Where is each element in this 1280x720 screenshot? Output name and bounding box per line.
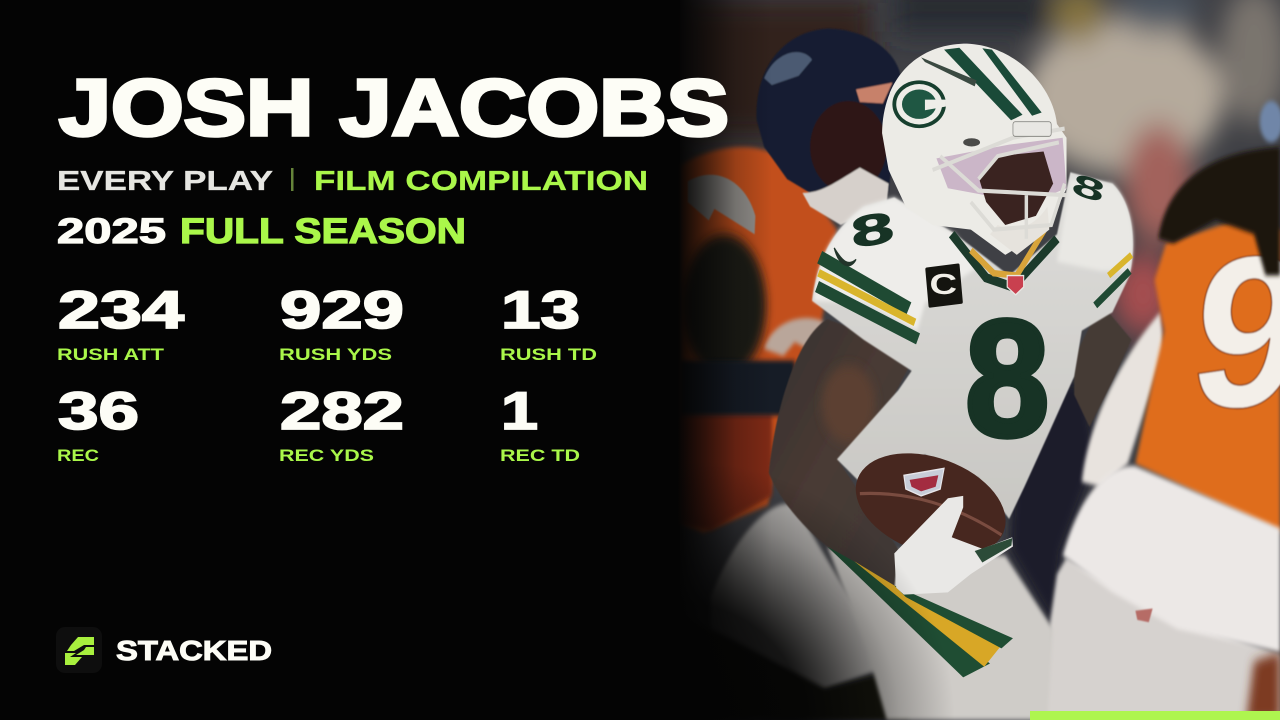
stat: rush yards: 929 [280,281,404,340]
stat: rush attempts: 234 [58,281,185,340]
icon: stacked logo [56,627,102,673]
stat: receiving touchdowns [500,382,580,465]
captain patch [925,263,963,308]
running back helmet [882,44,1067,255]
photo: running back in white jersey [527,0,1280,720]
season line [57,212,466,251]
sleeve stripes [820,257,909,309]
stat: rush attempts: RUSH ATT [57,345,165,364]
stat: rush touchdowns: RUSH TD [500,345,597,364]
season line: FULL SEASON [180,212,466,251]
swoosh [834,248,856,266]
stat: receptions: REC [57,446,99,465]
stat: rush yards [279,281,404,364]
chest number eight: 8 [965,286,1049,471]
shoulder highlights [814,197,979,331]
stat: receptions [57,382,139,465]
brand wordmark: STACKED [116,635,272,666]
G logo [892,80,946,128]
pants [827,546,1053,720]
shoulder number eight: 8 [849,203,896,258]
subtitle: every play, film compilation [57,165,648,196]
white shorts [1063,466,1280,652]
stat: receiving yards [279,382,404,465]
white sleeve arm [1082,312,1164,487]
title: JOSH JACOBS [59,63,729,152]
stat: receiving yards: REC YDS [279,446,374,465]
stat: receiving touchdowns: 1 [501,382,538,441]
leg [1036,558,1280,720]
stat: rush yards: RUSH YDS [279,345,392,364]
stat: rush attempts [57,281,185,364]
subtitle: every play, film compilation: EVERY PLAY [57,165,273,196]
defender navy helmet [756,28,900,225]
accent bar [1030,711,1280,720]
arm [769,319,913,588]
defender in orange jersey, left [680,28,910,720]
hair [1158,147,1280,276]
right defender, orange jersey number 9 [1036,101,1280,720]
collar [952,234,1057,287]
green and gold pant stripe [827,546,990,677]
cover for blur bleed left of photo [527,0,670,720]
blurred stadium crowd [680,0,1280,720]
stat: receptions: 36 [58,382,139,441]
stat: receiving yards: 282 [280,382,404,441]
stat: rush touchdowns [500,281,597,364]
running back body: 8 [1069,167,1108,210]
football [847,436,1015,574]
stat: receiving touchdowns: REC TD [500,446,580,465]
jersey [812,172,1133,519]
lower left fade [679,459,955,720]
NFL collar shield [1007,276,1024,295]
orange jersey [1135,220,1280,533]
captain patch: C [930,268,957,300]
left edge fade to black [669,0,772,720]
facemask [933,129,1067,239]
subtitle: every play, film compilation: FILM COMPILATION [314,165,648,196]
running back body [769,167,1133,720]
stat: rush touchdowns: 13 [501,281,580,340]
glove [894,496,1013,595]
visor and face [936,138,1067,197]
helmet stripes [944,48,1023,120]
season line: 2025 [57,212,166,251]
